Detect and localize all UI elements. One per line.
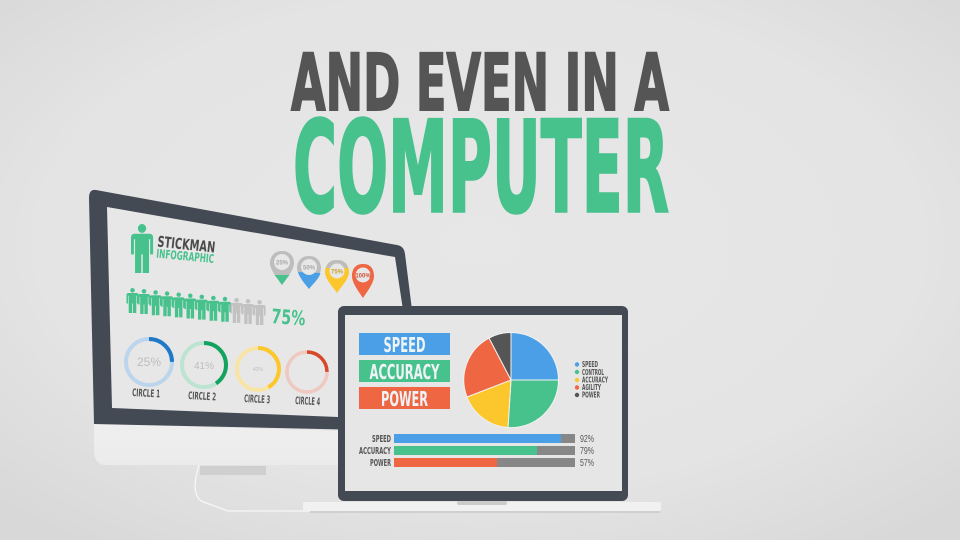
monitor bezel: [89, 190, 412, 431]
power button: [359, 387, 450, 411]
pie legend: AGILITY: [582, 383, 601, 392]
laptop base: [303, 501, 661, 513]
circle 2: 41%: [194, 361, 214, 372]
laptop: [303, 306, 661, 513]
circle 4: CIRCLE 4: [295, 395, 320, 408]
accuracy button: [359, 360, 450, 384]
speed bar: [372, 434, 594, 445]
speed button: [359, 333, 450, 357]
pin 75%: [325, 260, 349, 293]
speed button: SPEED: [384, 333, 426, 357]
accuracy bar: ACCURACY: [359, 446, 391, 457]
title: line 1: AND EVEN IN A: [291, 39, 669, 129]
logo text: INFOGRAPHIC: [156, 247, 215, 266]
monitor stand: [195, 465, 310, 511]
circle 3: [237, 348, 279, 406]
speed bar: SPEED: [372, 434, 391, 445]
stickman row: gray: [230, 298, 266, 325]
circle 2: [182, 343, 226, 403]
logo text: [156, 233, 216, 266]
pin 100%: 100%: [355, 274, 371, 280]
monitor chin: [94, 424, 345, 465]
circle 1: CIRCLE 1: [132, 387, 160, 400]
desktop monitor: [89, 190, 412, 511]
laptop screen: [345, 315, 622, 491]
75% label: 75%: [271, 304, 306, 330]
circle 1: [126, 339, 172, 400]
pin 100%: [352, 264, 374, 298]
power bar: [370, 458, 594, 469]
pin 75%: 75%: [331, 270, 344, 276]
pie legend: SPEED: [582, 360, 598, 369]
circle 1: 25%: [137, 355, 161, 369]
pin 50%: 50%: [303, 266, 316, 272]
power bar: 57%: [580, 458, 594, 469]
pin 25%: 25%: [276, 260, 289, 266]
logo text: STICKMAN: [157, 233, 216, 257]
power bar: POWER: [370, 458, 391, 469]
pin 50%: [297, 256, 321, 289]
power button: POWER: [381, 387, 428, 411]
pie legend: [575, 360, 608, 400]
stickman row: green: [126, 288, 231, 322]
pie legend: ACCURACY: [582, 376, 608, 385]
accuracy bar: 79%: [580, 446, 594, 457]
accuracy bar: [359, 446, 594, 457]
circle 4: [287, 352, 327, 408]
circle 2: CIRCLE 2: [188, 390, 216, 403]
pie chart: [464, 332, 559, 428]
pie legend: POWER: [582, 391, 600, 400]
pie legend: CONTROL: [582, 368, 604, 377]
circle 3: 42%: [253, 367, 264, 373]
logo: stickman: [131, 224, 153, 273]
laptop bezel: [338, 306, 628, 501]
accuracy button: ACCURACY: [370, 360, 440, 384]
monitor screen: [107, 207, 403, 417]
circle 3: CIRCLE 3: [244, 393, 270, 406]
speed bar: 92%: [580, 434, 594, 445]
pin 25%: [270, 251, 294, 285]
